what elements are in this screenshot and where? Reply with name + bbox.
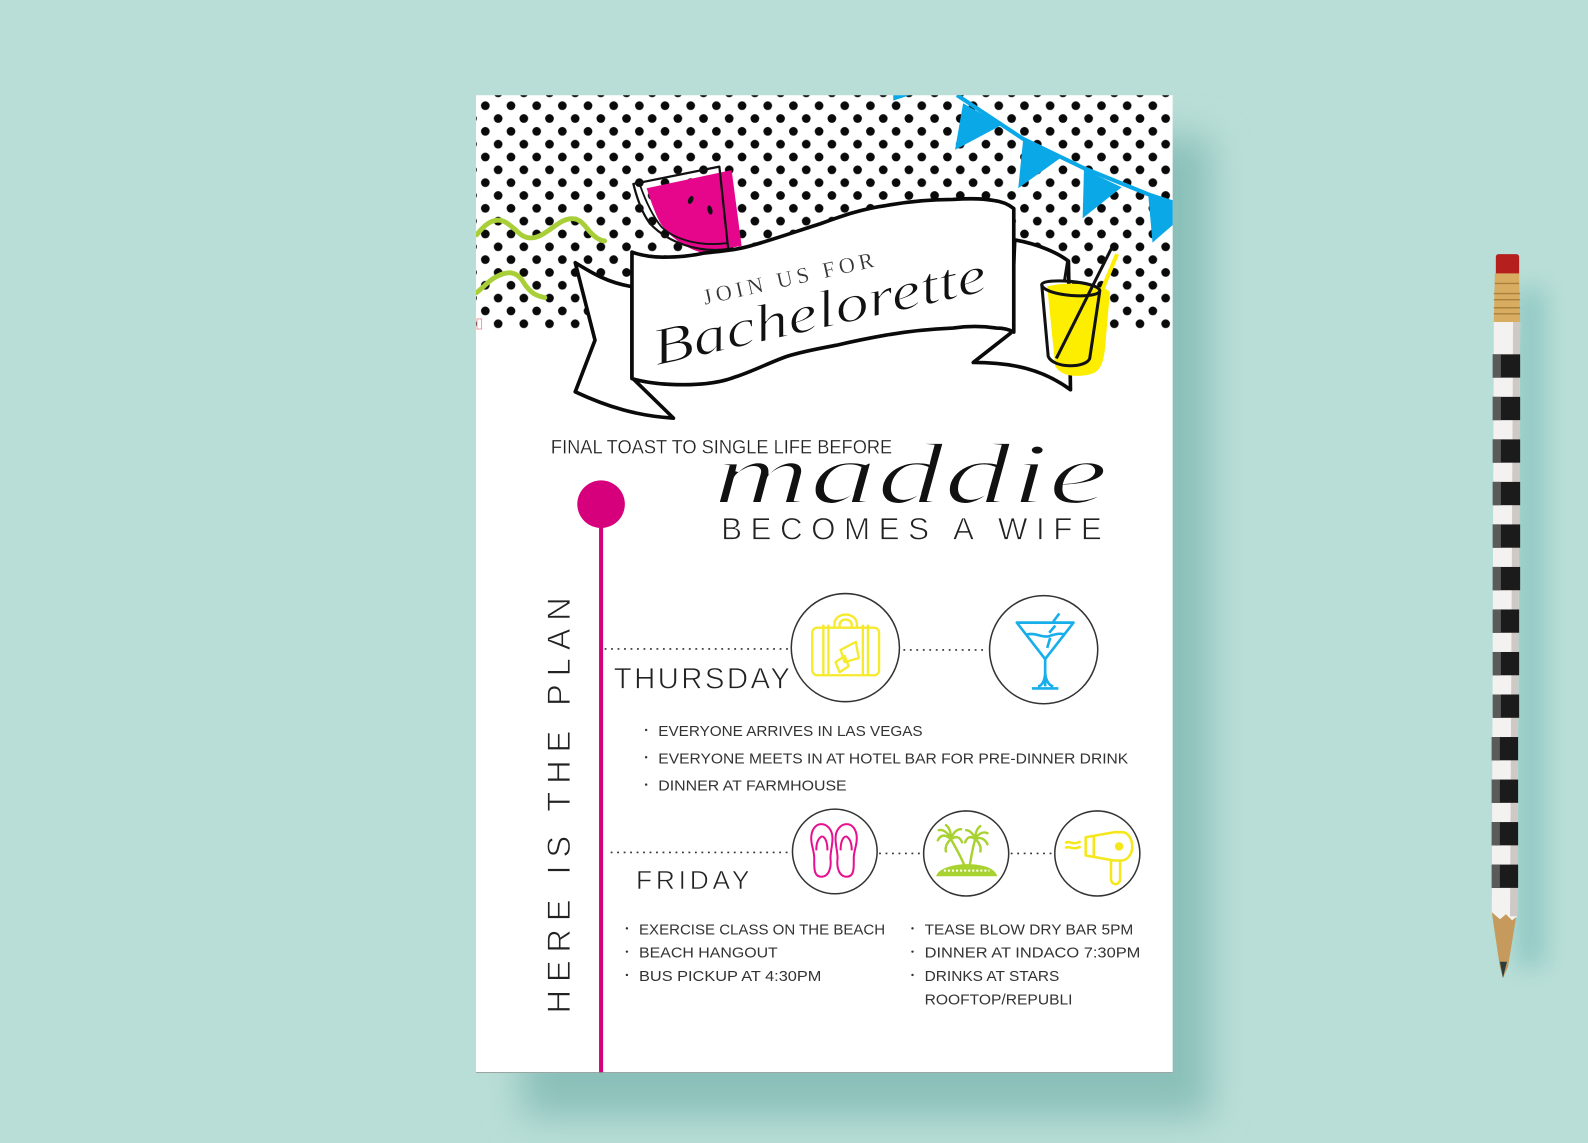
icon circle: hair dryer bbox=[1055, 811, 1140, 896]
icon: watermelon bbox=[633, 167, 742, 252]
text: bachelorette: Bachelorette bbox=[646, 246, 992, 377]
icon circle: palm island bbox=[924, 811, 1009, 896]
icon circle: martini bbox=[990, 596, 1098, 704]
icon: drink glass bbox=[1042, 248, 1117, 376]
bullet list: thursday: DINNER AT FARMHOUSE bbox=[658, 778, 847, 795]
heading: thursday: THURSDAY bbox=[614, 662, 790, 695]
polka dot background bbox=[476, 95, 1173, 330]
bullet list: friday right bbox=[911, 921, 1140, 1008]
bullet list: friday right: DINNER AT INDACO 7:30PM bbox=[925, 945, 1140, 962]
icon circle: suitcase bbox=[791, 594, 899, 702]
green squiggles bbox=[477, 219, 605, 298]
ribbon banner bbox=[575, 199, 1070, 418]
tiny marker bbox=[477, 319, 482, 329]
bullet list: thursday: EVERYONE ARRIVES IN LAS VEGAS bbox=[658, 723, 923, 740]
bullet list: thursday: EVERYONE MEETS IN AT HOTEL BAR FOR PRE-DINNER DRINK bbox=[658, 750, 1128, 767]
heading: friday: FRIDAY bbox=[636, 865, 749, 895]
dotted connectors bbox=[605, 649, 1054, 853]
right ribbon tail bbox=[973, 240, 1070, 390]
pencil body bbox=[1492, 322, 1520, 923]
pencil bbox=[1492, 254, 1520, 978]
text: maddie: maddie bbox=[713, 425, 1108, 522]
bullet list: friday left bbox=[626, 924, 884, 981]
left ribbon tail bbox=[575, 263, 673, 418]
icon circle: flip-flops bbox=[792, 809, 877, 894]
bullet list: friday left: EXERCISE CLASS ON THE BEACH bbox=[639, 921, 885, 938]
text: final toast: FINAL TOAST TO SINGLE LIFE BEFORE bbox=[551, 438, 892, 459]
bullet list: friday right: DRINKS AT STARS bbox=[925, 968, 1059, 985]
pencil shadow bbox=[1516, 289, 1544, 967]
text: here is the plan: HERE IS THE PLAN bbox=[541, 597, 577, 1013]
bunting flags bbox=[893, 95, 1173, 243]
main ribbon panel bbox=[632, 199, 1014, 385]
timeline pin bbox=[577, 480, 625, 1073]
card shadow bbox=[522, 137, 1210, 1117]
pencil tip bbox=[1492, 912, 1516, 978]
pencil ferrule bbox=[1494, 273, 1520, 322]
bullet list: friday left: BEACH HANGOUT bbox=[639, 945, 778, 962]
pencil eraser bbox=[1496, 254, 1519, 274]
panel: invitation card bbox=[476, 95, 1173, 1073]
text: becomes a wife: BECOMES A WIFE bbox=[721, 512, 1102, 547]
text: join us for: JOIN US FOR bbox=[701, 246, 880, 310]
bullet list: thursday bbox=[645, 723, 1128, 795]
bullet list: friday right: TEASE BLOW DRY BAR 5PM bbox=[925, 921, 1133, 938]
bullet list: friday left: BUS PICKUP AT 4:30PM bbox=[639, 968, 821, 985]
pencil stripes bbox=[1492, 354, 1520, 888]
bullet list: friday right: ROOFTOP/REPUBLI bbox=[925, 991, 1073, 1008]
